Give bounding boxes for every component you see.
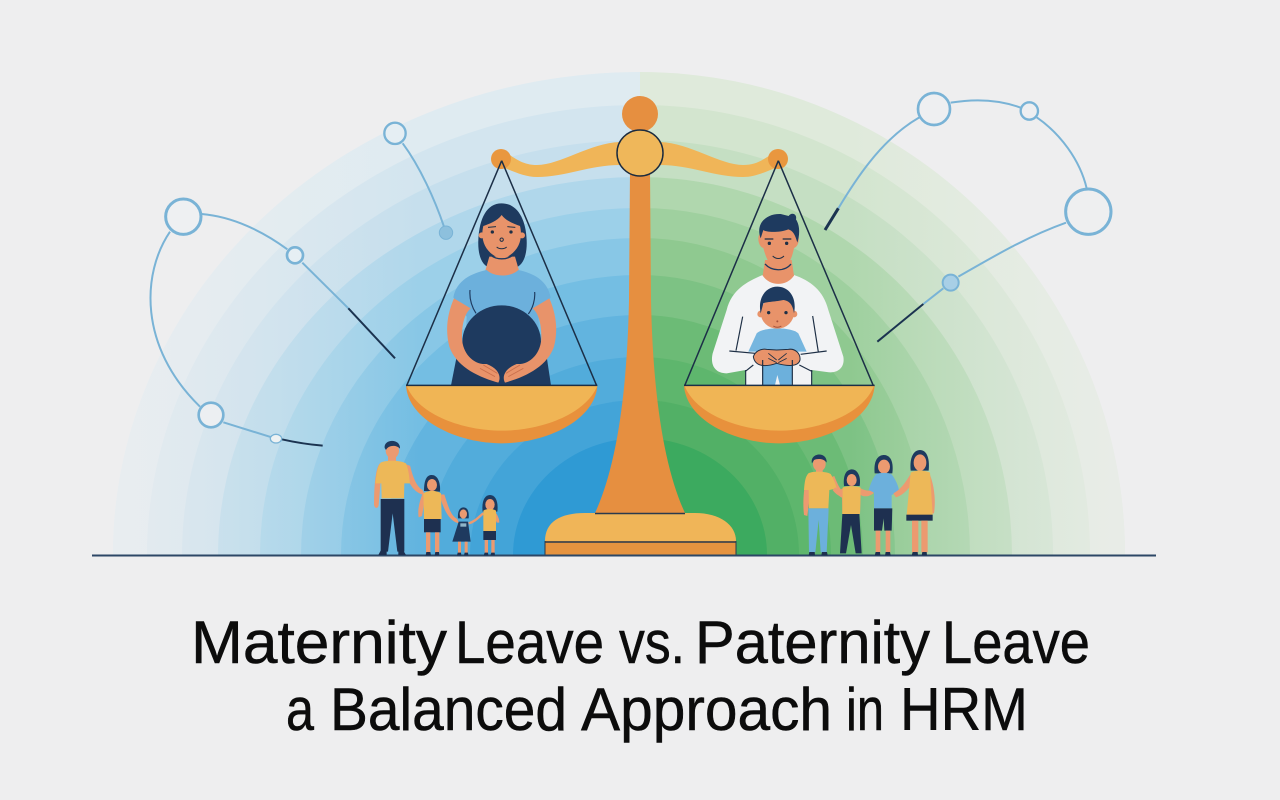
neck and head bbox=[763, 260, 794, 284]
scale: beam, knobs and pivot bbox=[491, 96, 788, 177]
title: vs. bbox=[619, 609, 685, 676]
title bbox=[191, 609, 1090, 743]
pants bbox=[451, 357, 551, 385]
neck and face bbox=[479, 215, 525, 278]
title: Maternity bbox=[191, 609, 447, 676]
shirt fold lines bbox=[729, 316, 827, 385]
title: HRM bbox=[900, 676, 1028, 743]
family group right bbox=[803, 450, 935, 555]
baby bbox=[748, 287, 807, 385]
shirt bbox=[453, 270, 551, 357]
title: in bbox=[846, 676, 884, 743]
figure: father holding baby bbox=[712, 214, 844, 385]
title: Leave bbox=[942, 609, 1090, 676]
title: a bbox=[286, 676, 315, 743]
figure: pregnant mother bbox=[447, 203, 556, 385]
older girl bbox=[418, 475, 458, 555]
girl in blue bbox=[869, 455, 899, 555]
right scale pan with strings bbox=[684, 161, 875, 443]
ground line bbox=[92, 554, 1156, 556]
title: Approach bbox=[581, 676, 832, 743]
title: Paternity bbox=[695, 609, 930, 676]
small girl bbox=[452, 507, 483, 555]
white shirt bbox=[712, 275, 844, 385]
left scale pan with strings bbox=[406, 161, 597, 443]
left node network bbox=[150, 123, 453, 446]
girl in yellow bbox=[833, 469, 873, 553]
woman bbox=[893, 450, 935, 555]
title: Balanced bbox=[330, 676, 567, 743]
boy bbox=[803, 454, 846, 555]
title: Leave bbox=[455, 609, 604, 676]
belly bbox=[462, 305, 541, 379]
scale: stand and base bbox=[545, 170, 736, 555]
green semicircle bands (paternity side) bbox=[640, 72, 1125, 555]
right node network bbox=[825, 93, 1111, 342]
father bbox=[374, 441, 423, 555]
blue semicircle bands (maternity side) bbox=[113, 72, 640, 555]
arms and hands bbox=[447, 298, 500, 383]
youngest girl bbox=[482, 495, 499, 555]
hair bbox=[478, 203, 527, 268]
family group left bbox=[374, 441, 499, 555]
